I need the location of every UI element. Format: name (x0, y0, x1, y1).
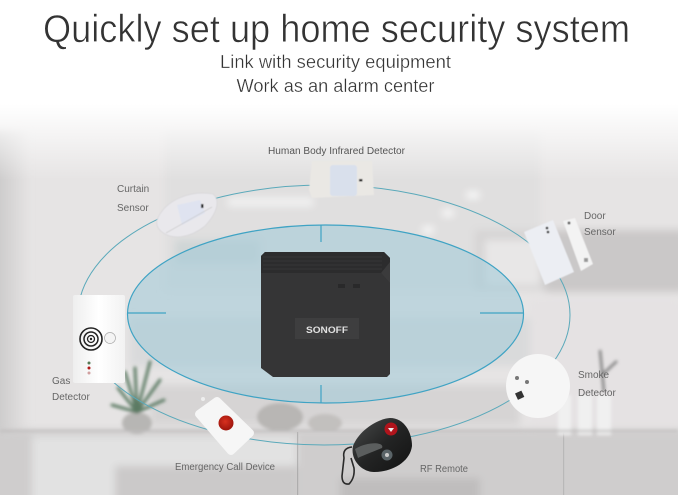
label: smoke detector: Smoke (578, 370, 610, 381)
label: curtain sensor: Sensor (117, 203, 149, 214)
device: curtain sensor (157, 193, 217, 237)
outer ellipse link ring (78, 185, 570, 445)
label: emergency call device: Emergency Call Device (175, 462, 275, 473)
label: smoke detector: Detector (578, 388, 616, 399)
label: gas detector: Gas (52, 376, 70, 387)
subtitle line 2: Work as an alarm center (236, 76, 434, 96)
label: RF remote: RF Remote (420, 464, 468, 475)
hub logo text: SONOFF (306, 325, 348, 336)
hub: Sonoff bridge (261, 252, 390, 377)
subtitle line 1: Link with security equipment (220, 52, 451, 72)
connector ticks (127, 225, 524, 403)
label: door sensor: Door (584, 211, 606, 222)
label: gas detector: Detector (52, 392, 90, 403)
device: RF remote (342, 418, 412, 484)
device: emergency call button (199, 397, 250, 451)
device: door sensor (524, 218, 593, 285)
device: smoke detector (506, 354, 570, 418)
inner ellipse zone (128, 225, 524, 403)
label: curtain sensor: Curtain (117, 184, 149, 195)
label: human body infrared detector: Human Body Infrared Detector (268, 146, 406, 157)
device: human body infrared detector (309, 161, 374, 198)
device: gas detector (73, 295, 125, 383)
title: Quickly set up home security system (43, 8, 630, 51)
label: door sensor: Sensor (584, 227, 616, 238)
